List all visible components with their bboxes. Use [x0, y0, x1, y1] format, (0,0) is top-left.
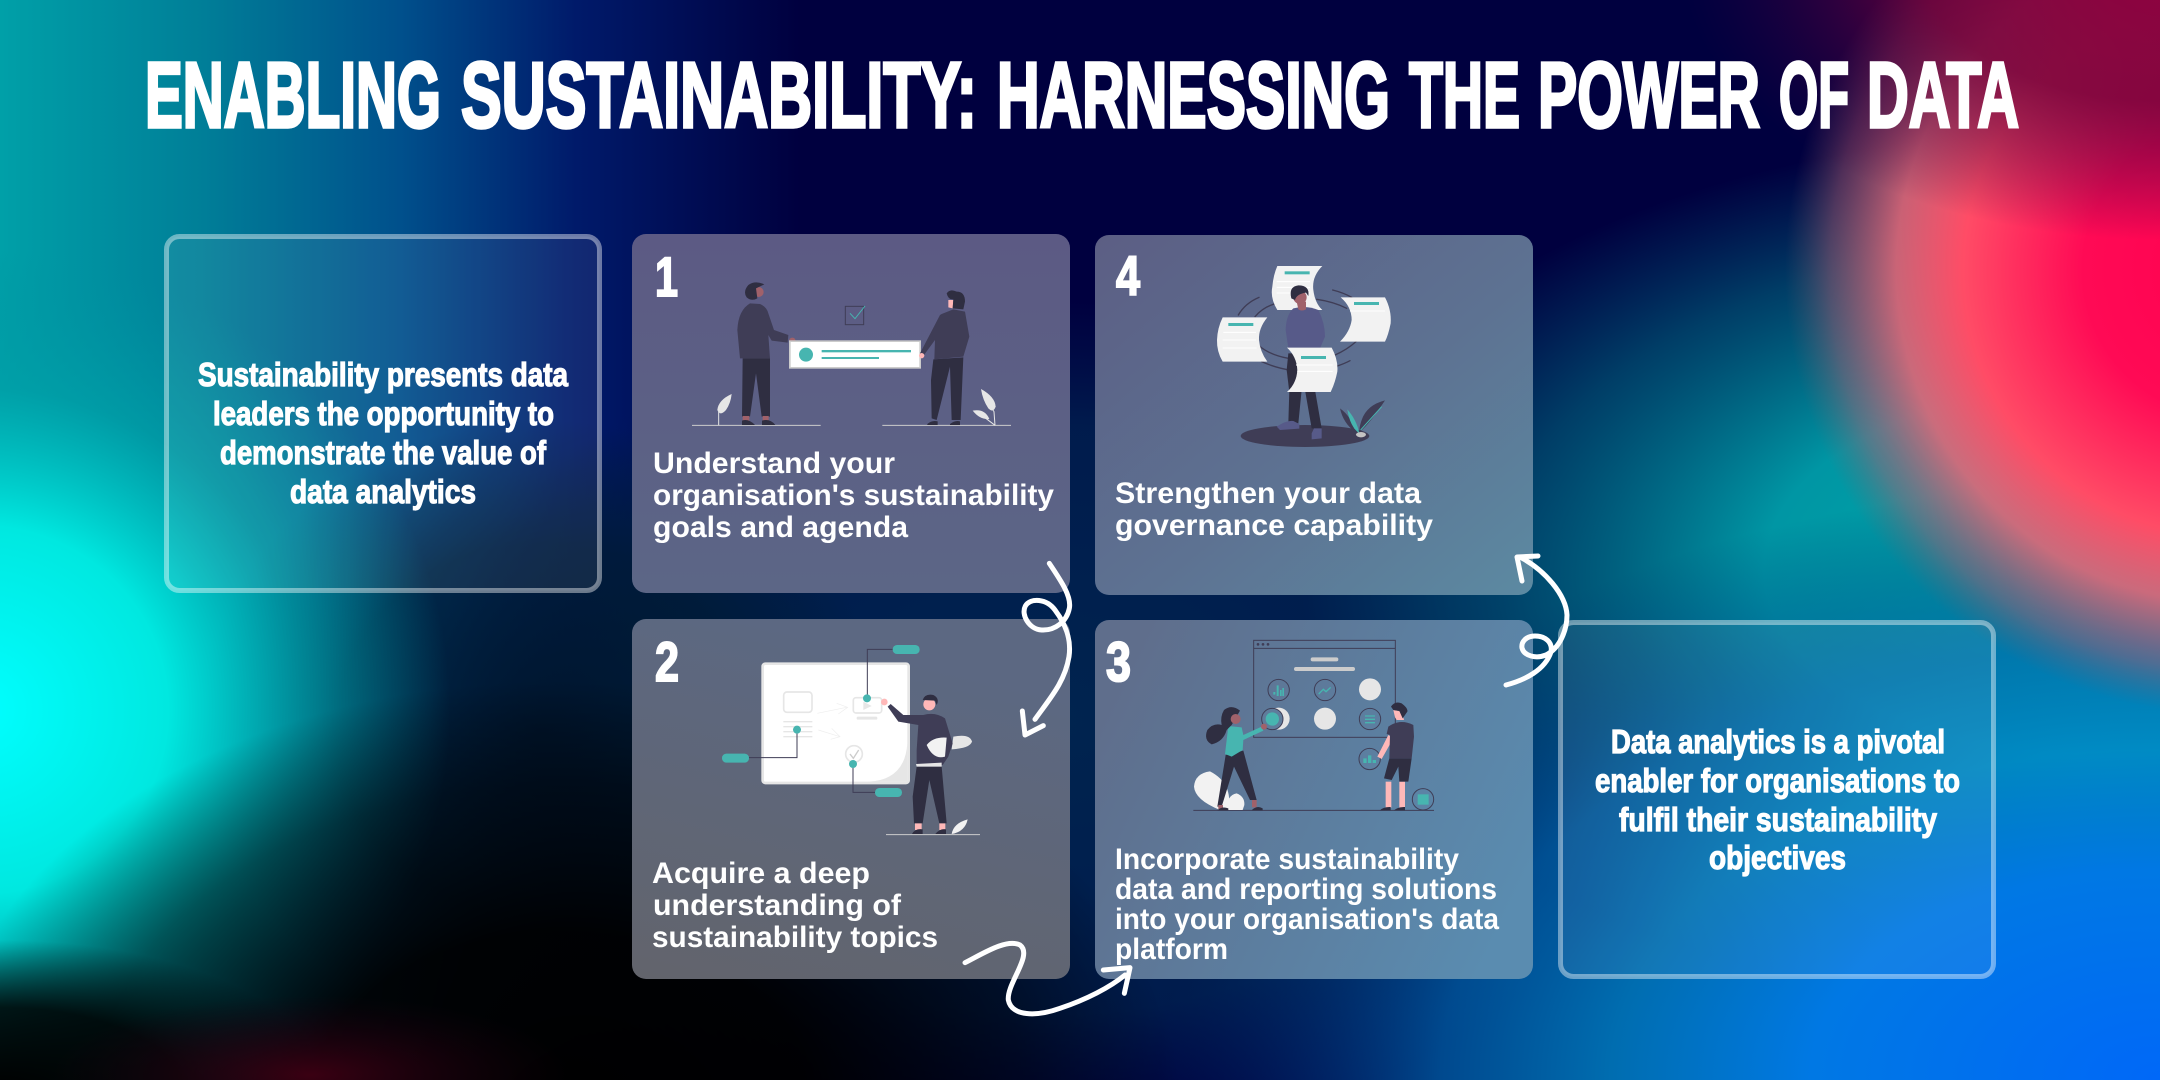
statement text: demonstrate the value of [220, 434, 547, 471]
statement text: objectives [1709, 839, 1846, 876]
title: THE [1409, 43, 1520, 147]
panel: step 4 [1095, 235, 1533, 595]
step text [1115, 843, 1499, 966]
step text: data and reporting solutions [1115, 873, 1497, 906]
step text [1115, 477, 1433, 542]
step text [653, 447, 1054, 544]
illustration: two people holding a card [692, 282, 1011, 425]
step text: governance capability [1115, 509, 1433, 542]
step text: sustainability topics [652, 921, 938, 954]
step number 1: 1 [655, 245, 678, 308]
statement text: enabler for organisations to [1595, 762, 1960, 799]
step number 2: 2 [655, 630, 679, 693]
step text [652, 857, 938, 954]
panel: left statement [166, 236, 600, 590]
arrow: step 1 to step 2 [1022, 563, 1070, 735]
step number 4: 4 [1116, 244, 1140, 307]
title: OF [1779, 43, 1849, 147]
panel: step 2 [632, 619, 1070, 979]
statement text [1595, 723, 1960, 876]
step text: goals and agenda [653, 511, 908, 544]
title: POWER [1538, 43, 1760, 147]
title [145, 43, 2019, 147]
step text: Strengthen your data [1115, 477, 1421, 510]
illustration: two people using a dashboard [1193, 640, 1434, 810]
arrow: step 2 to step 3 [965, 943, 1130, 1014]
statement text: Data analytics is a pivotal [1611, 723, 1945, 760]
step number 3: 3 [1106, 630, 1131, 693]
step text: platform [1115, 933, 1228, 966]
statement text: leaders the opportunity to [213, 395, 554, 432]
step text: organisation's sustainability [653, 479, 1054, 512]
statement text [198, 356, 569, 510]
panel: right statement [1560, 622, 1994, 976]
step text: Incorporate sustainability [1115, 843, 1459, 876]
step text: into your organisation's data [1115, 903, 1499, 936]
arrow: step 3 to step 4 [1506, 556, 1567, 685]
title: DATA [1867, 43, 2019, 147]
title: SUSTAINABILITY: [461, 43, 977, 147]
statement text: Sustainability presents data [198, 356, 569, 393]
title: HARNESSING [997, 43, 1390, 147]
illustration: person presenting on a whiteboard [722, 645, 980, 835]
step text: Understand your [653, 447, 895, 480]
step text: Acquire a deep [652, 857, 870, 890]
step text: understanding of [653, 889, 902, 922]
illustration: person with orbiting documents [1217, 266, 1391, 447]
title: ENABLING [145, 43, 441, 147]
panel: step 1 [632, 234, 1070, 593]
statement text: data analytics [290, 473, 476, 510]
panel: step 3 [1095, 620, 1533, 979]
statement text: fulfil their sustainability [1619, 801, 1938, 838]
